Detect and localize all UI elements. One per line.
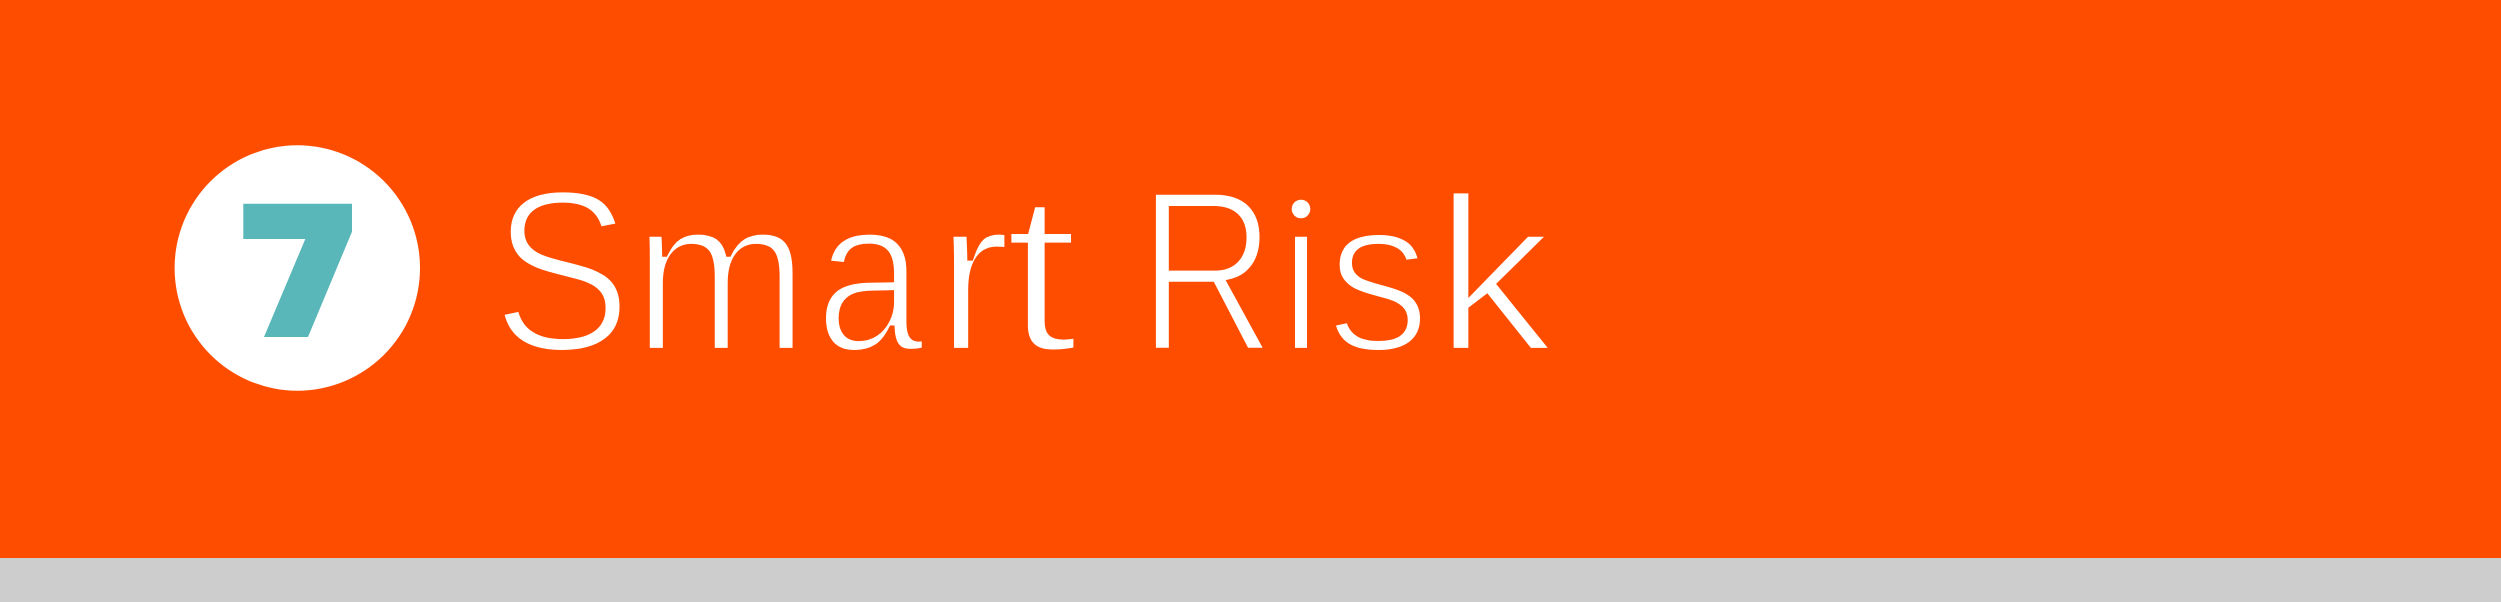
- title: Smart Risk: s: [1327, 151, 1430, 398]
- title: Smart Risk: m: [632, 151, 809, 398]
- title: Smart Risk: r: [935, 150, 1011, 398]
- title: Smart Risk: i: [1280, 152, 1323, 399]
- title: Smart Risk: R: [1138, 142, 1276, 400]
- title: Smart Risk: [492, 142, 1555, 400]
- title: Smart Risk: k: [1434, 150, 1555, 398]
- footer strip: [0, 558, 2501, 602]
- title: Smart Risk: a: [815, 152, 925, 398]
- badge circle: [175, 145, 420, 391]
- title: Smart Risk: t: [1004, 145, 1079, 399]
- title: Smart Risk: S: [492, 142, 632, 400]
- number badge: [175, 145, 420, 391]
- numeral 7: [243, 204, 352, 337]
